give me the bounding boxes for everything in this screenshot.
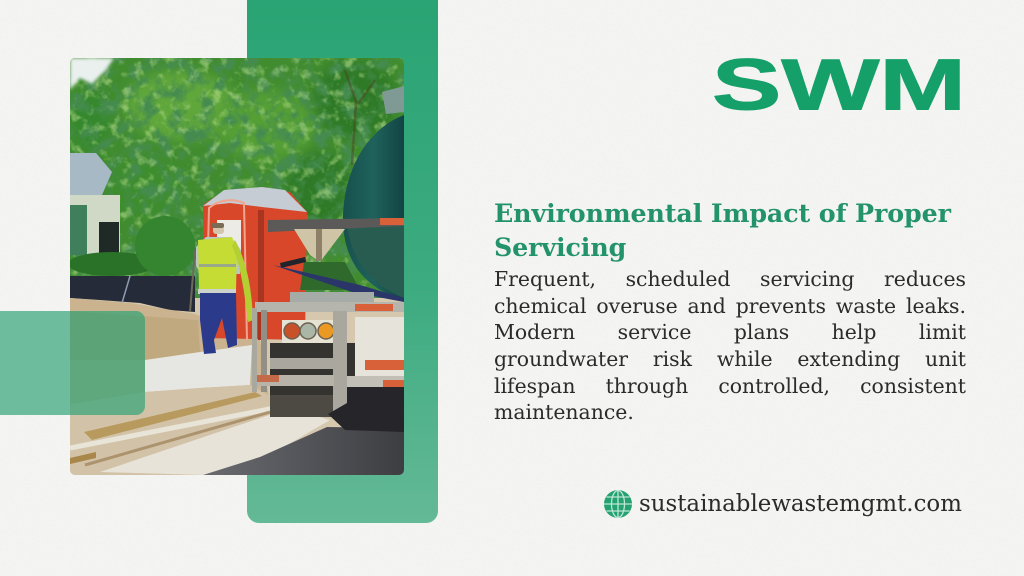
lower dirt and kerb <box>70 385 270 475</box>
body text: lifespan through controlled, consistent <box>494 374 966 398</box>
truck rear frame <box>252 218 404 432</box>
septic tank <box>343 115 404 300</box>
body text <box>494 267 966 424</box>
body text: maintenance. <box>494 400 634 424</box>
house <box>70 153 120 255</box>
photo: worker and septic truck servicing a portable toilet <box>70 58 404 475</box>
icon: globe <box>604 490 632 518</box>
body text: chemical overuse and prevents waste leaks. <box>494 294 966 318</box>
ground <box>70 298 270 404</box>
background foliage <box>70 58 404 298</box>
website url: sustainablewastemgmt.com <box>639 491 962 517</box>
heading <box>494 198 952 262</box>
heading: Servicing <box>494 232 626 262</box>
body text: Modern service plans help limit <box>494 320 966 344</box>
body text: Frequent, scheduled servicing reduces <box>494 267 966 291</box>
sidewalk <box>145 345 252 392</box>
road <box>203 427 404 475</box>
hedge and bush <box>68 216 195 276</box>
translucent green square over the photo <box>0 311 145 415</box>
heading: Environmental Impact of Proper <box>494 198 951 228</box>
green vertical band <box>247 0 438 523</box>
portable toilet <box>203 187 307 340</box>
silt fence <box>70 276 195 312</box>
worker in hi-vis vest <box>190 223 253 354</box>
body text: groundwater risk while extending unit <box>494 347 966 371</box>
